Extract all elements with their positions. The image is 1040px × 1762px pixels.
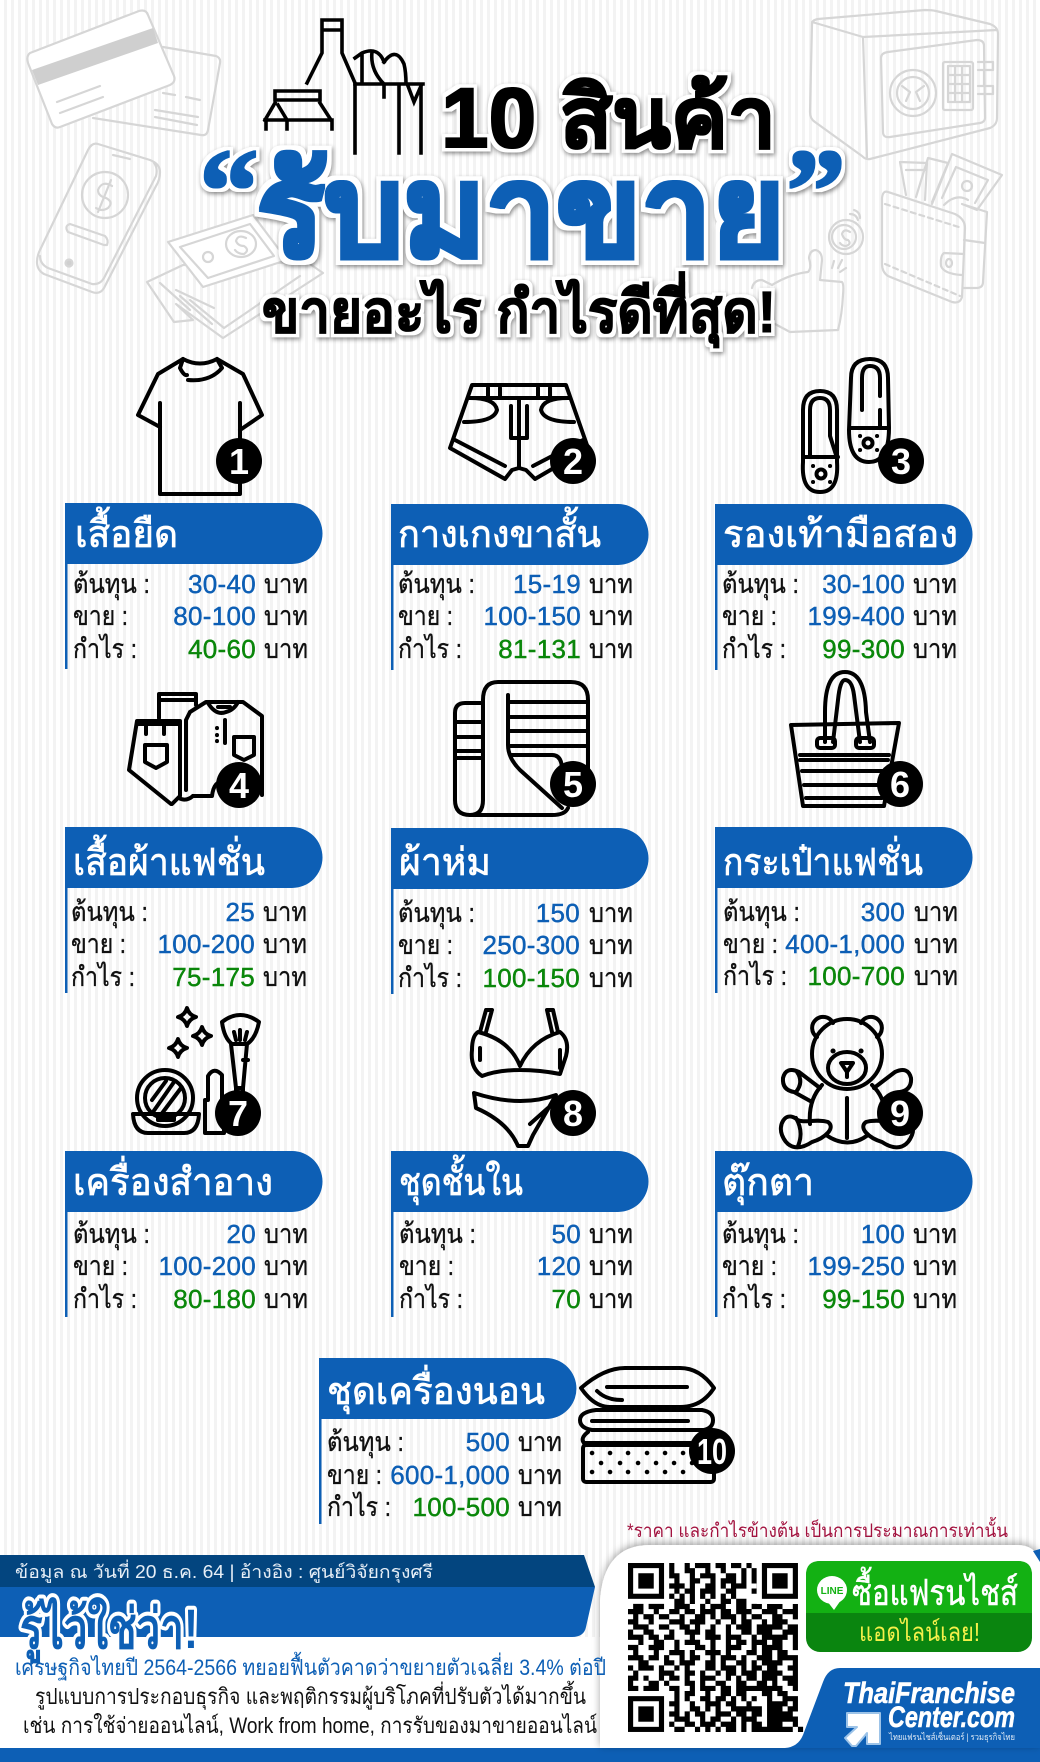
price rows: 99-300: [822, 634, 905, 664]
price rows: บาท: [264, 601, 308, 631]
card 3: รองเท้ามือสอง: [715, 504, 972, 670]
icon: shoes: [803, 359, 889, 492]
banner: [715, 827, 972, 993]
badge 5: 5: [563, 764, 583, 805]
price rows: [722, 569, 957, 664]
price rows: ขาย :: [398, 930, 453, 960]
price rows: 99-150: [822, 1284, 905, 1314]
badge 7: [215, 1090, 261, 1136]
price rows: บาท: [263, 929, 307, 959]
footer blue band: [0, 1587, 595, 1637]
badge 4: [216, 762, 262, 808]
tips text: เศรษฐกิจไทยปี 2564-2566 ทยอยฟื้นตัวคาดว่าขยายตัวเฉลี่ย 3.4% ต่อปี: [15, 1652, 606, 1681]
price rows: บาท: [914, 897, 958, 927]
badge 3: 3: [891, 441, 911, 482]
price rows: บาท: [264, 1284, 308, 1314]
ThaiFranchise Center logo panel: [785, 1668, 1040, 1748]
icon: underwear: [472, 1010, 567, 1146]
price rows: 500: [466, 1427, 510, 1457]
price rows: ขาย :: [327, 1460, 382, 1490]
price rows: บาท: [913, 569, 957, 599]
background icon: thumbs up with coin: [752, 210, 863, 332]
price rows: 100-200: [158, 1251, 256, 1281]
corner accent: [1033, 1549, 1040, 1562]
price rows: กำไร :: [398, 963, 462, 993]
price rows: กำไร :: [723, 961, 787, 991]
background icon: mobile phone: [37, 144, 160, 293]
price rows: ต้นทุน :: [73, 569, 150, 601]
icon: teddy bear: [781, 1017, 913, 1147]
badge 8: [550, 1090, 596, 1136]
logo tagline: ไทยแฟรนไชส์เซ็นเตอร์ | รวมธุรกิจไทย: [888, 1730, 1015, 1743]
icon: blanket: [455, 682, 588, 815]
price rows: ขาย :: [722, 1251, 777, 1281]
badge 2: [550, 438, 596, 484]
price rows: [723, 897, 958, 991]
price rows: [399, 1219, 633, 1314]
price rows: บาท: [518, 1427, 562, 1457]
icon: t-shirt: [138, 359, 262, 494]
price rows: 20: [226, 1219, 256, 1249]
price rows: [327, 1427, 562, 1522]
card 2: กางเกงขาสั้น: [391, 504, 648, 670]
banner: [715, 504, 972, 670]
price rows: ขาย :: [73, 1251, 128, 1281]
card 5: ผ้าห่ม: [391, 828, 648, 994]
footer bottom band: [0, 1748, 1040, 1762]
price rows: กำไร :: [398, 634, 462, 664]
price rows: ขาย :: [71, 929, 126, 959]
price rows: บาท: [589, 1251, 633, 1281]
card 9: ตุ๊กตา: [715, 1151, 972, 1317]
banner: กางเกงขาสั้น: [398, 506, 601, 556]
price rows: 30-40: [188, 569, 256, 599]
price rows: กำไร :: [722, 1284, 786, 1314]
price rows: ต้นทุน :: [327, 1427, 404, 1459]
title line 1: 10 สินค้า: [441, 71, 776, 165]
badge 8: 8: [563, 1093, 583, 1134]
price rows: ต้นทุน :: [722, 569, 799, 601]
banner: ตุ๊กตา: [722, 1162, 814, 1205]
price rows: บาท: [589, 1219, 633, 1249]
icon: LINE bubble: [817, 1576, 847, 1610]
price rows: บาท: [589, 930, 633, 960]
badge 6: [877, 761, 923, 807]
price rows: บาท: [264, 1219, 308, 1249]
price rows: ต้นทุน :: [723, 897, 800, 929]
price rows: บาท: [264, 1251, 308, 1281]
price rows: บาท: [263, 897, 307, 927]
price rows: 81-131: [498, 634, 581, 664]
price rows: 600-1,000: [390, 1460, 510, 1490]
button body: [806, 1561, 1032, 1652]
price rows: [73, 1219, 308, 1314]
title: [199, 71, 846, 349]
price rows: 75-175: [172, 962, 255, 992]
tips heading: รู้ไว้ใช่ว่า!: [20, 1596, 198, 1664]
price rows: 100-200: [157, 929, 255, 959]
price rows: บาท: [589, 569, 633, 599]
price rows: 250-300: [482, 930, 580, 960]
price rows: กำไร :: [73, 634, 137, 664]
banner: [391, 504, 648, 670]
price rows: [71, 897, 307, 992]
tips text: รูปแบบการประกอบธุรกิจ และพฤติกรรมผู้บริโภคที่ปรับตัวได้มากขึ้น: [35, 1681, 586, 1710]
top decorative line icons: lamp, bottle and glasses: [265, 20, 423, 153]
banner: [65, 1151, 322, 1317]
badge 9: 9: [890, 1093, 910, 1134]
price rows: ขาย :: [723, 929, 778, 959]
price rows: บาท: [264, 569, 308, 599]
icon: shorts: [450, 385, 588, 479]
button sub text: แอดไลน์เลย!: [859, 1617, 980, 1647]
title line 3: ขายอะไร กำไรดีที่สุด!: [262, 271, 776, 349]
price rows: ต้นทุน :: [71, 897, 148, 929]
price rows: ต้นทุน :: [398, 898, 475, 930]
price rows: 100-150: [482, 963, 580, 993]
price rows: 300: [861, 897, 905, 927]
badge 7: 7: [228, 1093, 248, 1134]
QR code: [628, 1563, 803, 1729]
price rows: 40-60: [188, 634, 256, 664]
price rows: 199-400: [807, 601, 905, 631]
price rows: 70: [551, 1284, 581, 1314]
price rows: 100-150: [483, 601, 581, 631]
footer source band: [0, 1555, 595, 1587]
price rows: 30-100: [822, 569, 905, 599]
price rows: บาท: [589, 898, 633, 928]
price rows: ต้นทุน :: [399, 1219, 476, 1251]
price rows: ขาย :: [73, 601, 128, 631]
price rows: 400-1,000: [785, 929, 905, 959]
badge 2: 2: [563, 441, 583, 482]
price rows: บาท: [518, 1460, 562, 1490]
price rows: ขาย :: [398, 601, 453, 631]
icon: bedding stack: [580, 1368, 714, 1482]
price disclaimer: *ราคา และกำไรข้างต้น เป็นการประมาณการเท่านั้น: [627, 1517, 1008, 1542]
price rows: ต้นทุน :: [398, 569, 475, 601]
background icon: wallet with cash: [882, 154, 1002, 302]
price rows: 15-19: [513, 569, 581, 599]
badge 1: [216, 438, 262, 484]
price rows: บาท: [914, 961, 958, 991]
background icon: safe: [810, 10, 998, 159]
banner: [65, 827, 322, 993]
banner: [319, 1358, 576, 1524]
banner: รองเท้ามือสอง: [723, 514, 958, 556]
price rows: กำไร :: [399, 1284, 463, 1314]
price rows: บาท: [913, 1251, 957, 1281]
price rows: 150: [536, 898, 580, 928]
icon: cosmetics: [133, 1008, 259, 1133]
badge 10: 10: [697, 1431, 727, 1472]
title line 2: รับมาขาย: [257, 141, 785, 284]
icon: LINE bubble: LINE: [821, 1586, 844, 1597]
banner: ผ้าห่ม: [399, 842, 491, 884]
badge 6: 6: [890, 764, 910, 805]
banner: เสื้อยืด: [75, 506, 178, 556]
banner: [391, 1151, 648, 1317]
price rows: บาท: [518, 1492, 562, 1522]
price rows: ขาย :: [399, 1251, 454, 1281]
badge 1: 1: [229, 441, 249, 482]
tips text: [15, 1652, 606, 1738]
card 1: เสื้อยืด: [65, 503, 322, 669]
price rows: บาท: [264, 634, 308, 664]
price rows: บาท: [589, 634, 633, 664]
price rows: 120: [537, 1251, 581, 1281]
price rows: 80-100: [173, 601, 256, 631]
price rows: [398, 898, 633, 993]
contact panel: [600, 1545, 1040, 1748]
price rows: บาท: [913, 1284, 957, 1314]
price rows: กำไร :: [73, 1284, 137, 1314]
price rows: [73, 569, 308, 664]
price rows: บาท: [913, 601, 957, 631]
banner: กระเป๋าแฟชั่น: [723, 836, 923, 884]
price rows: ขาย :: [722, 601, 777, 631]
price rows: [722, 1219, 957, 1314]
card 7: เครื่องสำอาง: [65, 1151, 322, 1317]
icon: fashion clothes: [129, 694, 262, 804]
price rows: กำไร :: [722, 634, 786, 664]
footer white area: [0, 1637, 620, 1748]
card 6: กระเป๋าแฟชั่น: [715, 827, 972, 993]
tips text: เช่น การใช้จ่ายออนไลน์, Work from home, การรับของมาขายออนไลน์: [23, 1713, 597, 1738]
price rows: ต้นทุน :: [73, 1219, 150, 1251]
price rows: 80-180: [173, 1284, 256, 1314]
badge 3: [878, 438, 924, 484]
badge 9: [877, 1090, 923, 1136]
price rows: กำไร :: [327, 1492, 391, 1522]
banner: [715, 1151, 972, 1317]
price rows: ต้นทุน :: [722, 1219, 799, 1251]
price rows: บาท: [589, 1284, 633, 1314]
LINE add-friend button: [806, 1561, 1032, 1652]
price rows: [398, 569, 633, 664]
icon: fashion handbag: [791, 672, 899, 806]
price rows: 50: [551, 1219, 581, 1249]
banner: [391, 828, 648, 994]
price rows: 100-500: [412, 1492, 510, 1522]
banner: ชุดเครื่องนอน: [327, 1365, 545, 1414]
footer source band: ข้อมูล ณ วันที่ 20 ธ.ค. 64 | อ้างอิง : ศูนย์วิจัยกรุงศรี: [15, 1559, 433, 1583]
badge 5: [550, 761, 596, 807]
card 10: ชุดเครื่องนอน: [319, 1358, 576, 1524]
card 8: ชุดชั้นใน: [391, 1151, 648, 1317]
opening quote: “: [199, 124, 259, 257]
price rows: บาท: [589, 963, 633, 993]
card 4: เสื้อผ้าแฟชั่น: [65, 827, 322, 993]
badge 4: 4: [229, 765, 249, 806]
price rows: 25: [225, 897, 255, 927]
price rows: 199-250: [807, 1251, 905, 1281]
price rows: 100-700: [807, 961, 905, 991]
banner: ชุดชั้นใน: [399, 1154, 523, 1205]
price rows: บาท: [263, 962, 307, 992]
price rows: บาท: [913, 1219, 957, 1249]
banner: เครื่องสำอาง: [73, 1156, 273, 1204]
price rows: 100: [861, 1219, 905, 1249]
background icon: credit cards: [27, 10, 220, 135]
background icon: banknotes: [147, 215, 323, 338]
price rows: บาท: [914, 929, 958, 959]
price rows: กำไร :: [71, 962, 135, 992]
price rows: บาท: [589, 601, 633, 631]
banner: เสื้อผ้าแฟชั่น: [73, 834, 265, 884]
banner: [65, 503, 322, 669]
logo arrow: [845, 1713, 880, 1746]
closing quote: ”: [786, 124, 846, 257]
price rows: บาท: [913, 634, 957, 664]
